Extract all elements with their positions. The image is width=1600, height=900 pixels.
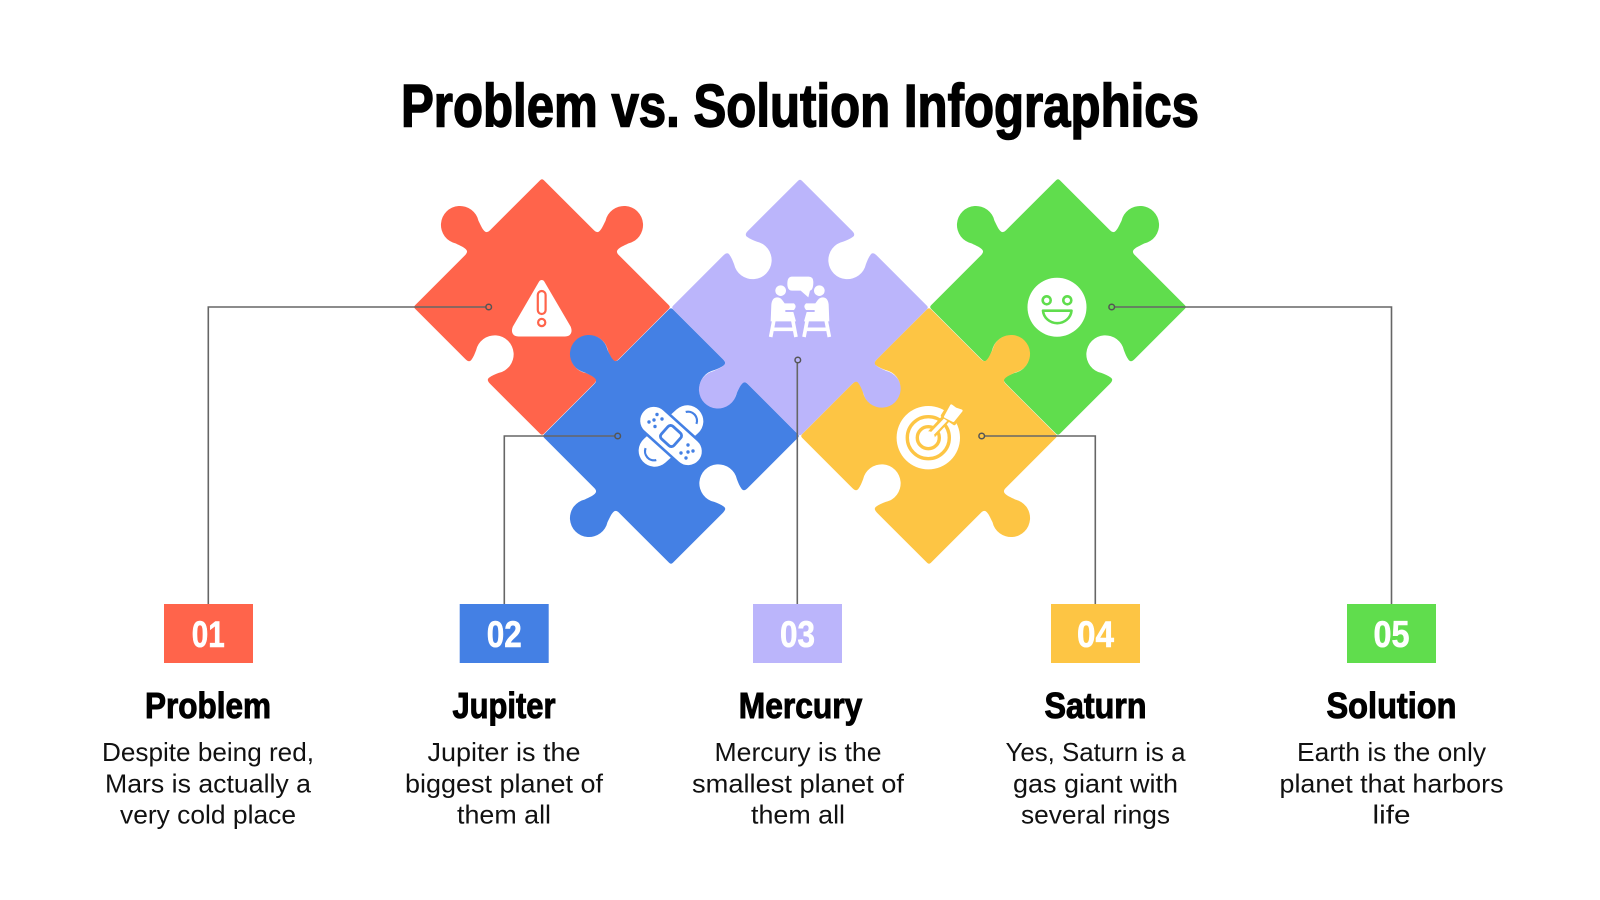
text: problem description: Despite being red, (102, 737, 314, 767)
puzzle: blue piece (480, 276, 800, 596)
icon: meeting (771, 277, 829, 337)
icon: crossed bandages (632, 399, 710, 473)
heading: Problem: Problem (145, 685, 271, 726)
text: saturn description: several rings (1021, 800, 1170, 830)
column 05: solution (1280, 604, 1504, 830)
puzzle: purple piece (640, 179, 960, 498)
number box 03 (753, 604, 842, 663)
title: Problem vs. Solution Infographics (401, 72, 1199, 140)
text: saturn description (1006, 737, 1186, 830)
number box 02: 02 (487, 614, 522, 655)
icon: smiling face (1028, 278, 1086, 337)
heading: Solution: Solution (1326, 685, 1456, 726)
column 01: problem (102, 604, 314, 830)
number box 02 (460, 604, 549, 663)
heading: Jupiter: Jupiter (452, 685, 556, 726)
text: mercury description (692, 737, 905, 830)
text: problem description (102, 737, 314, 830)
text: mercury description: them all (751, 800, 845, 830)
number box 05: 05 (1374, 614, 1410, 655)
text: saturn description: gas giant with (1013, 768, 1178, 798)
connector: solution (1109, 304, 1392, 604)
heading: Saturn: Saturn (1044, 685, 1146, 726)
number box 04: 04 (1077, 614, 1114, 655)
puzzle: yellow piece (800, 276, 1120, 596)
text: saturn description: Yes, Saturn is a (1006, 737, 1186, 767)
text: problem description: very cold place (120, 800, 296, 830)
text: solution description (1280, 737, 1504, 830)
column 02: jupiter (405, 604, 604, 830)
number box 04 (1051, 604, 1140, 663)
text: mercury description: Mercury is the (714, 737, 882, 767)
icon: target with arrow (897, 401, 964, 469)
text: solution description: Earth is the only (1297, 737, 1486, 767)
text: solution description: life (1372, 800, 1410, 830)
icon: warning triangle (515, 283, 569, 334)
connector: jupiter (504, 433, 620, 604)
puzzle: green piece (898, 116, 1218, 436)
text: mercury description: smallest planet of (692, 768, 905, 798)
number box 03: 03 (780, 614, 815, 655)
puzzle: red piece (382, 116, 702, 436)
text: solution description: planet that harbors (1280, 768, 1504, 798)
connector: saturn (979, 433, 1095, 604)
heading: Mercury: Mercury (739, 685, 862, 726)
text: jupiter description: Jupiter is the (428, 737, 580, 767)
number box 01 (164, 604, 253, 663)
number box 05 (1347, 604, 1436, 663)
text: jupiter description (405, 737, 604, 830)
column 03: mercury (692, 604, 905, 830)
connector: mercury (795, 357, 801, 604)
column 04: saturn (1006, 604, 1186, 830)
text: problem description: Mars is actually a (105, 768, 312, 798)
text: jupiter description: them all (457, 800, 551, 830)
number box 01: 01 (192, 614, 225, 655)
text: jupiter description: biggest planet of (405, 768, 604, 798)
connector: problem (208, 304, 492, 604)
